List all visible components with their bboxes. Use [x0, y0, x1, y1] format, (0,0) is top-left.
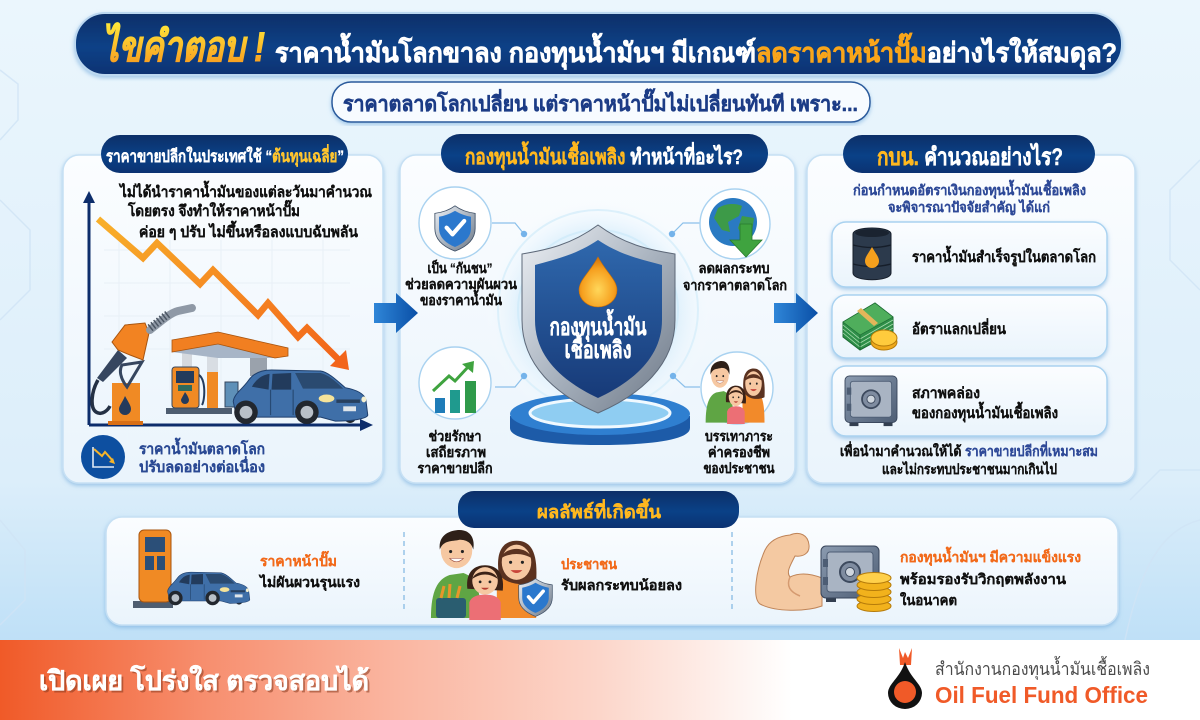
intro text: ก่อนกำหนดอัตราเงินกองทุนน้ำมันเชื้อเพลิง: [853, 179, 1086, 199]
title main text: ราคาน้ำมันโลกขาลง กองทุนน้ำมันฯ มีเกณฑ์ลดราคาหน้าปั๊มอย่างไรให้สมดุล?: [275, 32, 1117, 70]
icon: gas station: [166, 332, 288, 414]
result: people: ประชาชน: [561, 556, 617, 572]
connector lines: [492, 223, 700, 387]
factor: exchange rate: [832, 295, 1107, 358]
factor: refined oil price: ราคาน้ำมันสำเร็จรูปในตลาดโลก: [912, 245, 1096, 267]
result: people: [431, 530, 682, 620]
item: retail stability: เสถียรภาพ: [426, 444, 486, 460]
item: retail stability: [418, 347, 492, 476]
panel: average cost retail price: [63, 135, 383, 483]
arrow: left to centre: [374, 293, 418, 333]
item: cost of living: [701, 352, 775, 476]
shield glow rings: [483, 195, 713, 425]
result: strong fund: กองทุนน้ำมันฯ มีความแข็งแรง: [900, 546, 1081, 566]
item: reduce global impact: ลดผลกระทบ: [698, 260, 770, 276]
title highlight: ไขคำตอบ: ไขคำตอบ !: [102, 22, 265, 70]
falling price arrow: [98, 219, 349, 370]
factor: refined oil price: [832, 222, 1107, 287]
result: strong fund: [756, 533, 1081, 612]
panel body text: ไม่ได้นำราคาน้ำมันของแต่ละวันมาคำนวณ: [118, 180, 372, 201]
result: strong fund: ในอนาคต: [900, 591, 957, 608]
panel heading: [441, 134, 768, 173]
icon: blue car: [233, 370, 368, 424]
panel heading: [101, 135, 348, 173]
subtitle pill: [332, 82, 870, 122]
badge caption: [139, 437, 265, 476]
result: pump price: ไม่ผันผวนรุนแรง: [258, 573, 360, 591]
intro text: [853, 179, 1086, 216]
panel heading: ราคาขายปลีกในประเทศใช้ “ต้นทุนเฉลี่ย”: [106, 144, 344, 167]
item: reduce global impact: จากราคาตลาดโลก: [683, 276, 787, 293]
panel heading: [843, 135, 1095, 173]
subtitle pill: ราคาตลาดโลกเปลี่ยน แต่ราคาหน้าปั๊มไม่เปลี่ยนทันที เพราะ...: [343, 88, 858, 116]
icon: falling chart badge: [81, 435, 125, 479]
panel body text: ค่อย ๆ ปรับ ไม่ขึ้นหรือลงแบบฉับพลัน: [139, 220, 359, 241]
shield label: เชื้อเพลิง: [564, 331, 632, 364]
item: buffer: ของราคาน้ำมัน: [420, 289, 502, 308]
item: buffer: ช่วยลดความผันผวน: [405, 276, 517, 292]
platform: [510, 393, 690, 445]
factor: fund liquidity: ของกองทุนน้ำมันเชื้อเพลิง: [912, 401, 1058, 423]
logo wordmark: [935, 656, 1150, 708]
panel: results: [106, 491, 1118, 625]
footer band: [0, 640, 1200, 720]
item: retail stability: ช่วยรักษา: [428, 428, 482, 444]
central shield: [522, 225, 675, 413]
results heading: [458, 491, 739, 528]
item: reduce global impact: [683, 189, 787, 293]
arrow: centre to right: [774, 293, 818, 333]
title banner: [75, 13, 1122, 75]
result: pump price: ราคาหน้าปั๊ม: [260, 550, 337, 569]
factor: exchange rate: อัตราแลกเปลี่ยน: [912, 318, 1007, 338]
panel heading: กบน. คำนวณอย่างไร?: [877, 142, 1063, 171]
closing text: [840, 441, 1098, 477]
item: cost of living: ค่าครองชีพ: [708, 444, 770, 460]
panel body text: [118, 180, 372, 241]
logo wordmark: สำนักงานกองทุนน้ำมันเชื้อเพลิง: [935, 656, 1150, 680]
item: retail stability: ราคาขายปลีก: [418, 460, 492, 476]
logo mark: [888, 648, 922, 709]
decorative circuit lines: [0, 70, 1200, 640]
panel: fund role: [400, 134, 795, 483]
item: cost of living: ของประชาชน: [704, 460, 775, 476]
result: strong fund: พร้อมรองรับวิกฤตพลังงาน: [900, 571, 1066, 587]
connector dots: [521, 231, 676, 379]
dividers: [404, 532, 732, 610]
item: buffer: เป็น “กันชน”: [428, 259, 492, 276]
closing text: เพื่อนำมาคำนวณให้ได้ ราคาขายปลีกที่เหมาะสม: [840, 441, 1098, 459]
panel: how it is calculated: [807, 135, 1135, 483]
footer slogan: เปิดเผย โปร่งใส ตรวจสอบได้: [39, 664, 369, 696]
result: people: รับผลกระทบน้อยลง: [561, 577, 682, 593]
badge caption: ราคาน้ำมันตลาดโลก: [139, 437, 265, 458]
factor: fund liquidity: สภาพคล่อง: [912, 385, 980, 402]
logo wordmark: Oil Fuel Fund Office: [935, 682, 1148, 708]
panel heading: กองทุนน้ำมันเชื้อเพลิง ทำหน้าที่อะไร?: [465, 141, 743, 171]
closing text: และไม่กระทบประชาชนมากเกินไป: [882, 460, 1057, 477]
results heading: ผลลัพธ์ที่เกิดขึ้น: [537, 498, 662, 522]
icon: fuel nozzle and pump base: [92, 308, 192, 425]
footer slogan: เปิดเผย โปร่งใส ตรวจสอบได้: [41, 666, 371, 698]
factor: fund liquidity: [832, 366, 1107, 436]
intro text: จะพิจารณาปัจจัยสำคัญ ได้แก่: [888, 198, 1050, 216]
oil drop: [579, 257, 617, 307]
shield label: [550, 308, 647, 364]
item: cost of living: บรรเทาภาระ: [705, 428, 773, 444]
item: buffer: [405, 187, 517, 308]
chart axes: [83, 191, 373, 431]
shield label: กองทุนน้ำมัน: [550, 308, 647, 343]
result: pump price: [133, 530, 360, 608]
badge caption: ปรับลดอย่างต่อเนื่อง: [139, 456, 265, 476]
panel body text: โดยตรง จึงทำให้ราคาหน้าปั๊ม: [127, 199, 300, 220]
chart grid: [104, 240, 350, 390]
